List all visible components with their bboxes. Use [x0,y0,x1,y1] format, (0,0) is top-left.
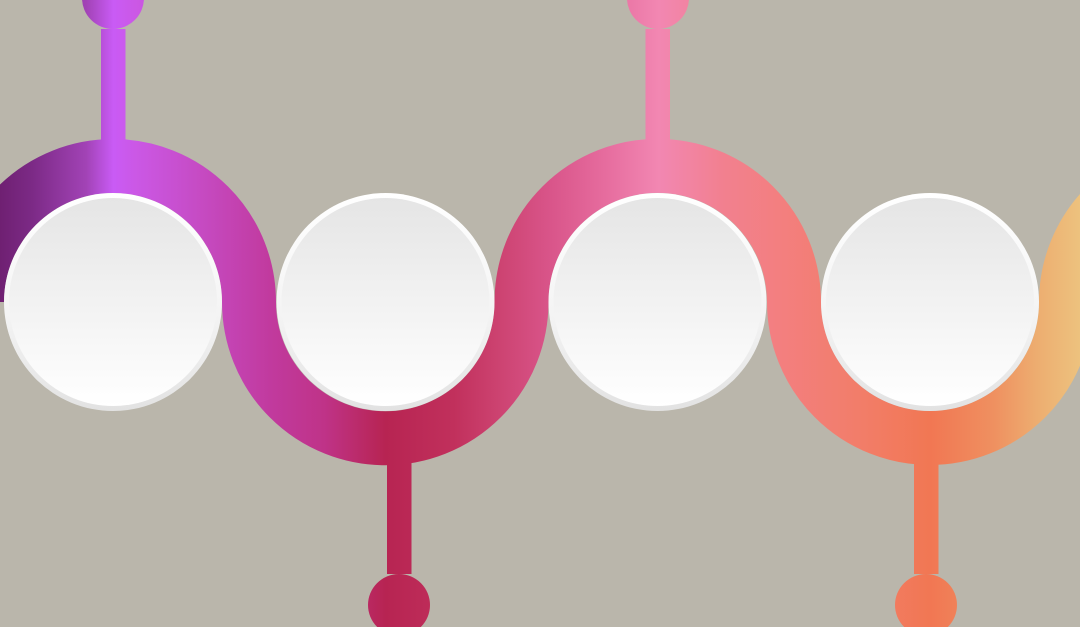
circle 3 [548,193,766,411]
connector 4: coral stem and knob [895,461,957,627]
circle 1 [4,193,222,411]
connector 2: crimson stem and knob [368,461,430,627]
circle 4 [821,193,1039,411]
wave ribbon [0,166,1080,438]
circle 2 [276,193,494,411]
connector 3: pink stem and knob [627,0,689,143]
connector 1: purple stem and knob [82,0,144,143]
